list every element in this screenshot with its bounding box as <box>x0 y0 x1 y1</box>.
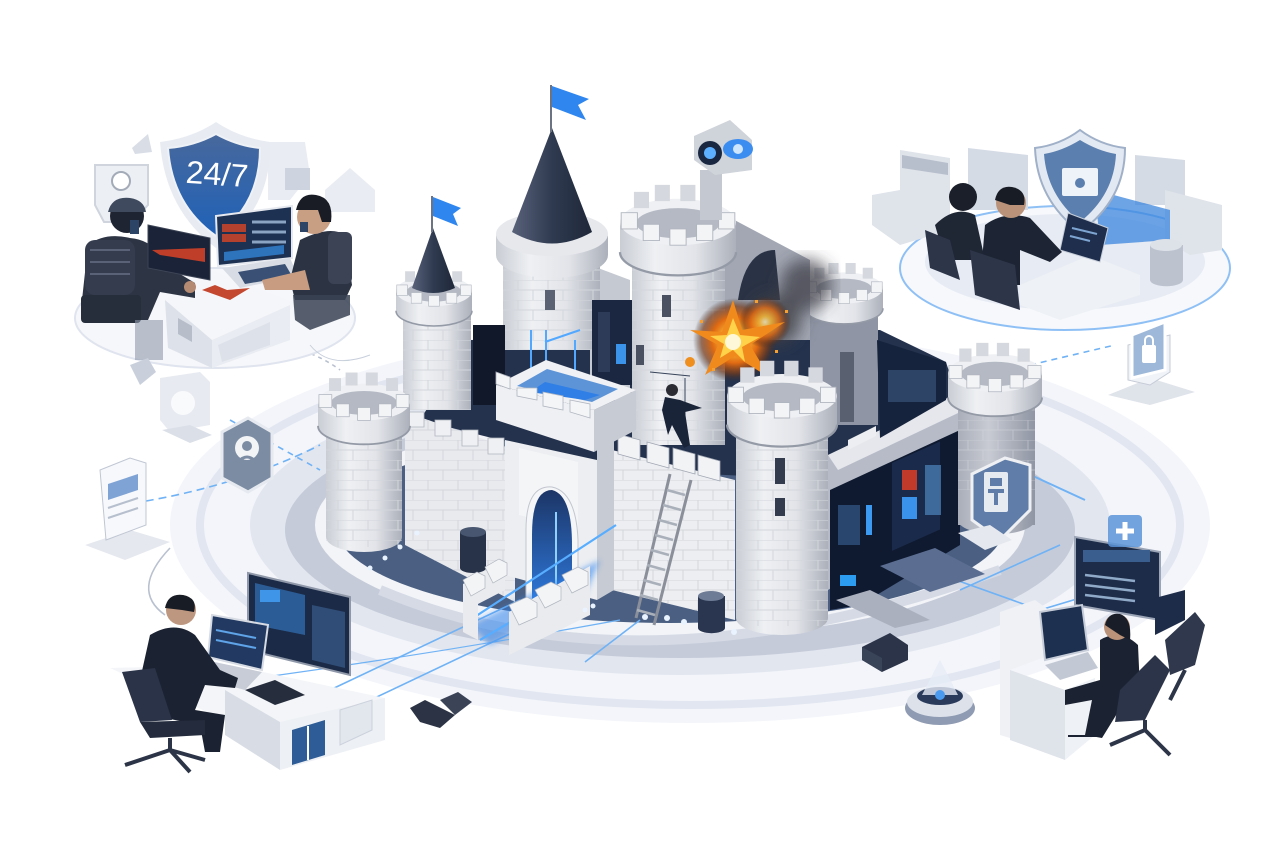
laptop <box>1040 605 1098 680</box>
upper dark screen behind wall <box>877 340 946 438</box>
icon: small kiosk <box>130 358 212 443</box>
keyboard console <box>880 548 985 592</box>
gate arch <box>526 487 578 610</box>
shield <box>1035 130 1125 232</box>
analyst <box>1065 614 1140 738</box>
back right tower <box>805 263 883 425</box>
big blue flag <box>551 85 589 132</box>
small blue flag <box>432 196 461 232</box>
laptop <box>190 615 268 690</box>
front low barbican wall <box>463 559 590 655</box>
monitors <box>248 573 350 675</box>
scene: bottom-left analyst desk <box>110 573 385 772</box>
castle <box>318 85 1042 655</box>
front left tower <box>318 373 410 552</box>
security camera <box>694 120 753 220</box>
grey background buildings <box>872 148 1222 255</box>
shield sign on stand <box>958 458 1030 550</box>
monitors <box>1075 515 1185 635</box>
far right tower <box>948 343 1042 534</box>
fire smoke behind tower <box>749 259 832 346</box>
chairs <box>1110 612 1205 755</box>
analyst <box>140 595 238 752</box>
connector curve <box>310 345 370 361</box>
glowing dots <box>368 530 737 635</box>
back dark inner courtyard <box>420 330 958 480</box>
explosion <box>685 296 791 382</box>
tall tower with big cone <box>496 128 608 350</box>
pillar and desk <box>1000 600 1095 760</box>
right analyst <box>262 195 352 330</box>
scene: top-left 24/7 operations desk <box>75 122 375 368</box>
dark server panels <box>473 300 632 405</box>
desk platform <box>75 268 355 368</box>
left wall <box>405 412 515 602</box>
right wall with screens <box>828 393 975 610</box>
icon: person badge <box>222 418 272 492</box>
analysts <box>925 183 1062 310</box>
centre tower <box>620 185 736 445</box>
ladder <box>636 474 691 625</box>
icon: beacon <box>905 660 975 725</box>
blue vertical beams <box>531 330 580 400</box>
attacker climbing <box>650 372 702 448</box>
24/7 shield: 24/7 <box>185 154 249 194</box>
back wall with vent <box>590 215 810 400</box>
right laptop <box>216 206 298 288</box>
desk <box>165 270 300 368</box>
right front wall <box>612 434 735 620</box>
drum canisters <box>460 527 725 633</box>
24/7 shield <box>160 122 270 248</box>
desk <box>110 665 385 770</box>
back left small tower <box>396 228 472 410</box>
ground rings <box>170 327 1210 723</box>
database cylinder <box>1150 239 1183 286</box>
icon: document on stand <box>85 458 170 560</box>
left analyst <box>81 198 196 360</box>
scene: top-right operations platform <box>872 130 1230 330</box>
icon: server box <box>862 633 908 672</box>
tablet and notepad <box>245 680 305 705</box>
gatehouse <box>496 360 636 610</box>
scene: bottom-right analyst desk <box>1000 515 1205 760</box>
red folder on desk <box>202 285 250 300</box>
icon: camera gadget <box>410 692 472 728</box>
office chair <box>122 668 205 772</box>
left monitor <box>148 225 210 280</box>
front right tower <box>727 361 837 635</box>
blue data bars <box>1095 190 1170 245</box>
background icons <box>95 134 375 222</box>
desk <box>1020 255 1140 320</box>
laptop <box>1060 213 1108 262</box>
circuit lines on the ground <box>120 344 1115 705</box>
icon: padlock kiosk <box>1108 322 1195 405</box>
chairs <box>925 230 960 280</box>
glowing drawbridge beams <box>470 525 616 645</box>
floor grate <box>836 590 930 628</box>
